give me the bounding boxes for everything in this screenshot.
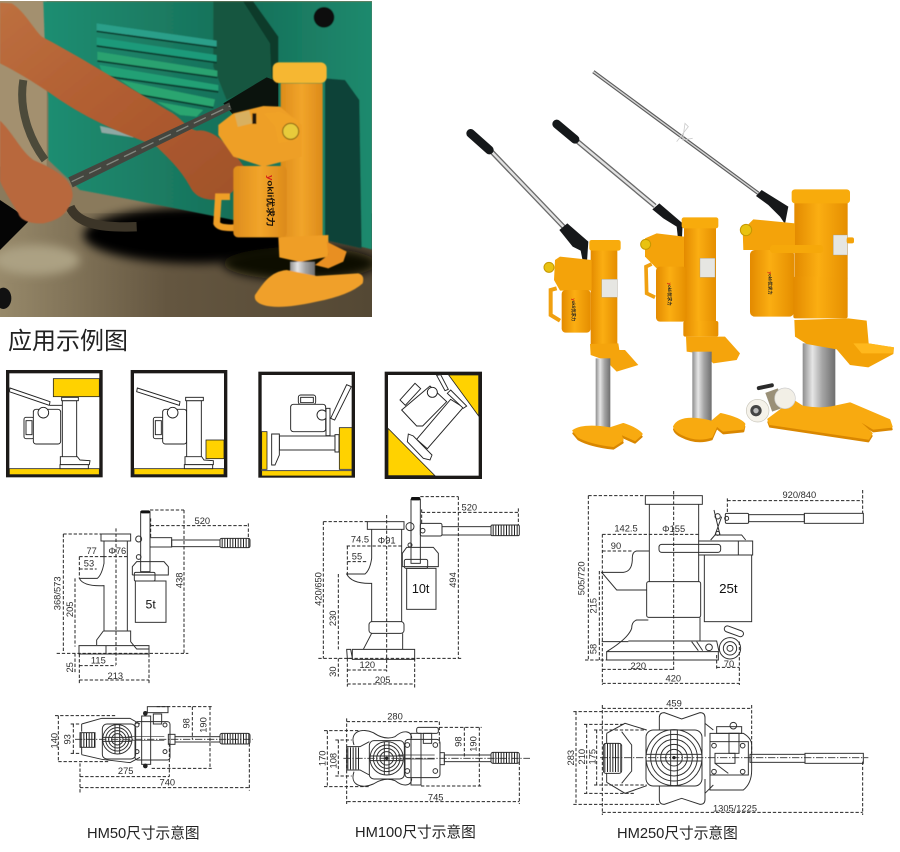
large jack 25t: y okli优求力 [766, 272, 773, 295]
product photo: three hydraulic claw jacks [471, 72, 894, 449]
dimensions: 53 [84, 558, 94, 568]
dimensions: 520 [462, 502, 477, 512]
green machine panel [43, 2, 372, 249]
caption: HM50: HM50尺寸示意图 [87, 824, 200, 842]
medium jack 10t: y okli优求力 [666, 283, 673, 306]
dimension drawing: HM100 top view [317, 712, 530, 804]
dimensions: 70 [724, 659, 734, 669]
dimensions [566, 699, 863, 815]
dimensions: Φ91 [378, 536, 396, 546]
icon: horizontal push between walls [260, 373, 353, 476]
dimension drawing: HM250 top view [566, 699, 868, 815]
dimension drawing: HM100 side view [313, 497, 519, 689]
dimensions: 115 [91, 656, 106, 666]
photo: worker operating yellow claw jack [0, 0, 377, 317]
dimensions: 283 [566, 750, 576, 765]
heading: application examples: 应用示例图 [8, 328, 128, 355]
dimensions [53, 510, 248, 683]
hose [22, 80, 45, 160]
dimensions: 438 [174, 573, 184, 588]
dimensions: 140 [49, 733, 59, 748]
dimensions: 25 [65, 662, 75, 673]
dimensions: 30 [328, 666, 338, 677]
large jack 25t [593, 72, 894, 441]
dimensions: 205 [65, 602, 75, 617]
small jack 5t [471, 133, 642, 449]
dimensions: 108 [328, 753, 338, 768]
dimensions: 55 [352, 552, 362, 562]
dimensions: 740 [160, 778, 175, 788]
dimensions: 494 [448, 572, 458, 588]
capacity 10t: 10t [412, 582, 430, 596]
dimensions: 213 [108, 671, 123, 681]
dimensions: 190 [468, 736, 478, 752]
lever bar [68, 77, 278, 187]
dimensions: 520 [195, 516, 210, 526]
second hand [0, 121, 73, 223]
dimensions: 98 [181, 718, 191, 729]
dimensions: 420/650 [313, 572, 323, 606]
dimensions: 920/840 [782, 490, 816, 500]
jack outline [602, 496, 863, 660]
caption: HM100: HM100尺寸示意图 [355, 823, 476, 841]
forearm [0, 3, 246, 200]
jack plan outline [343, 727, 530, 786]
small jack 5t: y okli优求力 [570, 298, 577, 321]
yellow jack in photo [217, 62, 363, 307]
capacity 25t: 25t [719, 581, 738, 596]
dimensions [313, 497, 518, 689]
dimensions [317, 712, 519, 804]
dimensions: 175 [587, 749, 597, 764]
dimensions: 93 [63, 734, 73, 745]
capacity 5t: 5t [146, 598, 156, 612]
jack outline [79, 510, 250, 654]
dimensions: 142.5 [614, 523, 638, 533]
dimensions: 90 [611, 541, 621, 551]
dimensions: 1305/1225 [713, 803, 757, 813]
dimension drawing: HM50 side view [53, 510, 250, 683]
jack plan outline [600, 713, 868, 804]
medium jack 10t [557, 124, 744, 441]
dimensions: 98 [453, 736, 463, 747]
icon: lifting load at toe [132, 372, 226, 476]
dimensions: 58 [589, 644, 599, 654]
dimensions: 205 [375, 675, 390, 685]
dimensions: 275 [118, 766, 133, 776]
dimensions: 368/573 [53, 576, 63, 610]
dimensions: 74.5 [351, 534, 369, 544]
dimensions: 215 [589, 598, 599, 613]
dimensions [49, 707, 249, 793]
dimensions: 505/720 [577, 561, 587, 595]
dimensions: Φ76 [108, 546, 126, 556]
floor [0, 200, 377, 317]
icon: lifting load from underside [8, 372, 101, 476]
caption: HM250: HM250尺寸示意图 [617, 824, 738, 842]
dimensions: 230 [328, 611, 338, 626]
jack plan outline [75, 707, 253, 768]
dimensions [577, 490, 863, 685]
icon: diagonal push [386, 373, 480, 477]
dimensions: 120 [360, 660, 375, 670]
dimension drawing: HM50 top view [49, 707, 253, 793]
dimension drawing: HM250 side view [577, 490, 863, 685]
dimensions: 210 [577, 749, 587, 764]
dimensions: 280 [387, 712, 403, 722]
jack outline [347, 497, 519, 659]
roller wheels and valve [746, 383, 795, 422]
dimensions: 420 [666, 674, 681, 684]
dimensions: 459 [666, 699, 682, 709]
dimensions: 77 [86, 546, 97, 556]
brand on reservoir: y okli优求力 [266, 175, 276, 227]
dimensions: 220 [631, 661, 646, 671]
dimensions: 745 [428, 792, 443, 802]
application icons [8, 372, 480, 477]
dimensions: Φ155 [662, 524, 685, 534]
dimensions: 170 [317, 751, 327, 766]
dimensions: 190 [199, 717, 209, 733]
